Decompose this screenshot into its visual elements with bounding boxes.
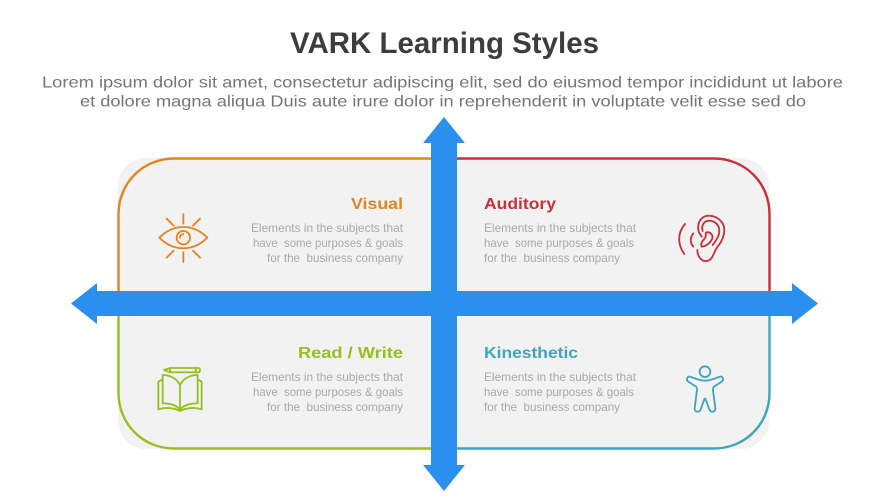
text block: visual: for the business company — [267, 251, 403, 265]
text block: auditory: Elements in the subjects that — [484, 221, 637, 235]
text block: kinesthetic: for the business company — [484, 400, 620, 414]
arrow: vertical double-headed — [423, 117, 465, 491]
icon: ear — [679, 216, 724, 261]
panel outline: kinesthetic — [444, 304, 770, 448]
panel outline: visual — [118, 158, 444, 304]
text block: kinesthetic — [484, 370, 637, 414]
text block: visual: have some purposes & goals — [253, 236, 403, 250]
subtitle text block: Lorem ipsum dolor sit amet, consectetur adipiscing elit, sed do eiusmod tempor incididunt ut labore — [42, 74, 843, 92]
section: kinesthetic — [484, 345, 723, 414]
section: visual — [159, 196, 404, 265]
text block: auditory — [484, 221, 637, 265]
heading: visual: Visual — [351, 196, 403, 213]
section: auditory — [484, 196, 724, 265]
text block: kinesthetic: have some purposes & goals — [484, 385, 634, 399]
text block: visual — [251, 221, 404, 265]
panel outline: read / write — [118, 304, 444, 448]
text block: visual: Elements in the subjects that — [251, 221, 404, 235]
text block: auditory: have some purposes & goals — [484, 236, 634, 250]
section: read / write — [158, 345, 404, 414]
text block: auditory: for the business company — [484, 251, 620, 265]
background panel — [118, 158, 769, 449]
icon: person — [687, 366, 723, 412]
text block: read / write: for the business company — [267, 400, 403, 414]
text block: kinesthetic: Elements in the subjects that — [484, 370, 637, 384]
subtitle text block — [42, 74, 843, 110]
subtitle text block: et dolore magna aliqua Duis aute irure dolor in reprehenderit in voluptate velit esse sed do — [80, 94, 806, 110]
heading: kinesthetic: Kinesthetic — [484, 345, 578, 362]
text block: read / write: have some purposes & goals — [253, 385, 403, 399]
panel outline: auditory — [444, 158, 770, 304]
icon: book and pencil — [158, 368, 202, 411]
heading: read / write: Read / Write — [298, 345, 403, 362]
title: VARK Learning Styles — [290, 27, 599, 60]
icon: eye — [159, 214, 207, 262]
text block: read / write — [251, 370, 404, 414]
arrow: horizontal double-headed — [71, 283, 818, 324]
text block: read / write: Elements in the subjects that — [251, 370, 404, 384]
heading: auditory: Auditory — [484, 196, 556, 213]
